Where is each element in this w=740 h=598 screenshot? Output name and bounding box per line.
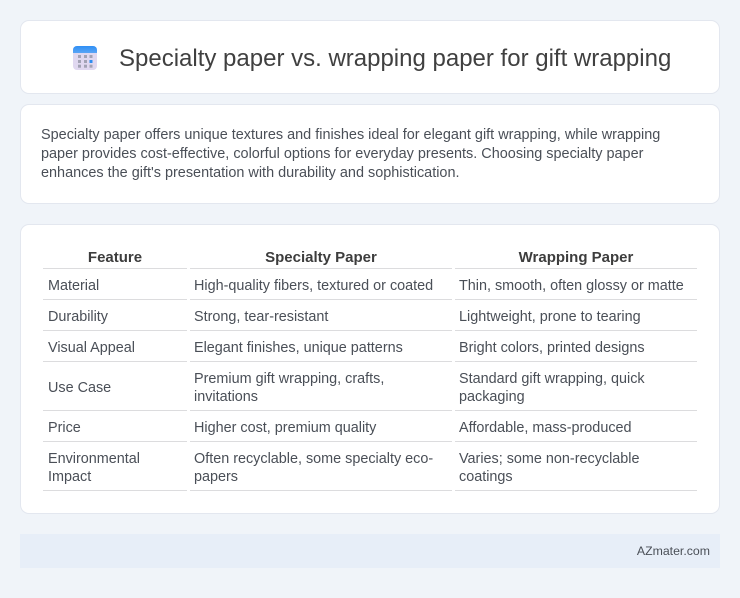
row: Use Case: Premium gift wrapping, crafts, — [194, 371, 384, 387]
row: Price: Higher cost, premium quality — [194, 420, 376, 436]
row: Environmental Impact: Varies; some non-recyclable — [459, 451, 640, 467]
row: Durability: Strong, tear-resistant — [194, 309, 328, 325]
row: Material: Thin, smooth, often glossy or matte — [459, 278, 684, 294]
panel: title card — [20, 20, 720, 94]
column header: Feature: Feature — [88, 249, 142, 266]
row: Use Case: Use Case — [48, 380, 111, 396]
row: Durability: Lightweight, prone to tearing — [459, 309, 641, 325]
row: Price: Affordable, mass-produced — [459, 420, 632, 436]
row: Price: Price — [48, 420, 81, 436]
panel: comparison table card — [20, 224, 720, 514]
row: Use Case: invitations — [194, 389, 258, 405]
panel: intro text card — [20, 104, 720, 204]
row: Visual Appeal — [48, 340, 645, 356]
column header: Specialty Paper: Specialty Paper — [265, 249, 377, 266]
row: Visual Appeal: Visual Appeal — [48, 340, 135, 356]
row: Visual Appeal: Elegant finishes, unique patterns — [194, 340, 403, 356]
row: Use Case: Standard gift wrapping, quick — [459, 371, 645, 387]
row: Material: Material — [48, 278, 99, 294]
intro text — [41, 127, 660, 181]
intro text: paper provides cost-effective, colorful options for everyday presents. Choosing specialty paper — [41, 146, 643, 162]
row: Material: High-quality fibers, textured or coated — [194, 278, 433, 294]
row: Price — [48, 420, 632, 436]
row: Durability — [48, 309, 641, 325]
row: Environmental Impact: Often recyclable, some specialty eco- — [194, 451, 433, 467]
row: Use Case — [48, 371, 645, 405]
column header: Wrapping Paper: Wrapping Paper — [519, 249, 633, 266]
intro text: Specialty paper offers unique textures and finishes ideal for elegant gift wrapping, while wrapping — [41, 127, 660, 143]
footer bar — [20, 534, 720, 568]
row: Durability: Durability — [48, 309, 108, 325]
row: Visual Appeal: Bright colors, printed designs — [459, 340, 645, 356]
intro text: enhances the gift's presentation with durability and sophistication. — [41, 165, 460, 181]
title: Specialty paper vs. wrapping paper for gift wrapping — [119, 45, 671, 72]
row: Environmental Impact: Impact — [48, 469, 91, 485]
row: Environmental Impact: coatings — [459, 469, 513, 485]
row: Environmental Impact: papers — [194, 469, 238, 485]
footer credit: AZmater.com — [637, 544, 710, 558]
comparison table — [43, 249, 697, 491]
row: Environmental Impact: Environmental — [48, 451, 140, 467]
row: Environmental Impact — [48, 451, 640, 485]
row: Material — [48, 278, 684, 294]
icon: calendar — [73, 46, 97, 70]
row: Use Case: packaging — [459, 389, 525, 405]
